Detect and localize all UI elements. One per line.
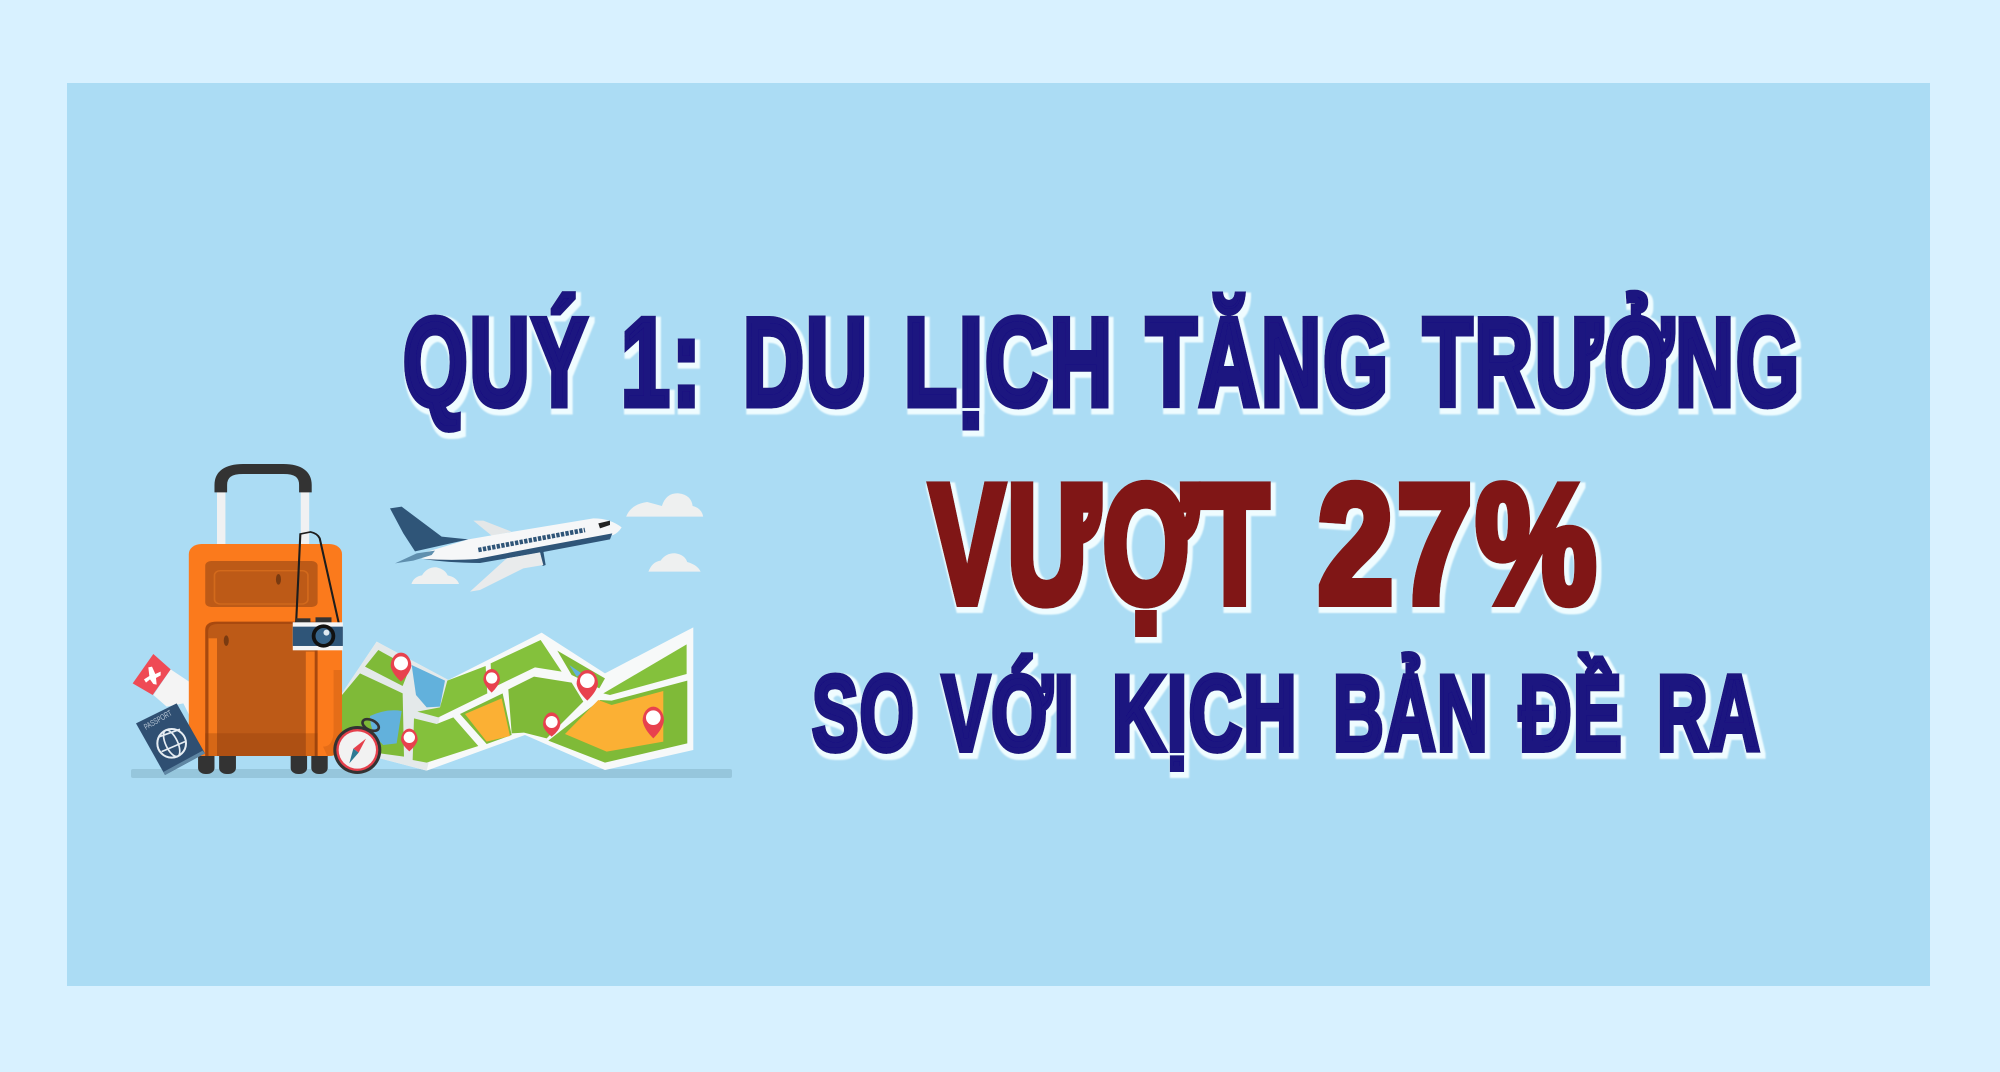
title line 1: LỊCH (904, 294, 1114, 432)
icon: airplane (390, 507, 622, 592)
icon: passport: PASSPORT (142, 708, 174, 732)
icon: passport (136, 703, 205, 775)
camera straps (296, 532, 339, 623)
title line 1: QUÝ (403, 294, 589, 432)
title line 1: TRƯỞNG (1423, 293, 1801, 432)
title line 1: TĂNG (1146, 294, 1390, 432)
title line 3: KỊCH (1112, 653, 1298, 773)
icon: clouds (411, 493, 703, 584)
title line 3: SO (812, 653, 915, 773)
title line 2: highlight figure: VƯỢT (930, 450, 1272, 638)
case body (189, 544, 342, 756)
title line 3: BẢN (1333, 653, 1489, 773)
zip pulls (276, 574, 281, 585)
icon: suitcase (189, 469, 342, 774)
title line 3: ĐỀ (1519, 653, 1623, 773)
title line 3: VỚI (942, 653, 1075, 773)
wheels (198, 750, 214, 774)
background panel (67, 83, 1930, 986)
title line 2: highlight figure: 27% (1318, 450, 1600, 638)
ground shadow (131, 769, 732, 778)
icon: folded map (342, 627, 693, 771)
handle poles (217, 492, 225, 545)
title line 1 (403, 293, 1801, 432)
map pins (391, 653, 664, 751)
icon: boarding ticket (133, 654, 192, 720)
icon: camera (293, 617, 343, 650)
icon: compass (333, 717, 381, 774)
lower pocket (205, 622, 318, 756)
title line 3: RA (1657, 653, 1761, 773)
title line 1: DU (743, 294, 869, 432)
handle grip (221, 469, 305, 492)
illustration: travel scene (131, 469, 732, 778)
title line 3 (812, 653, 1761, 773)
upper pocket (205, 561, 318, 607)
title line 1: 1: (621, 294, 703, 432)
bottom shade (205, 733, 318, 756)
